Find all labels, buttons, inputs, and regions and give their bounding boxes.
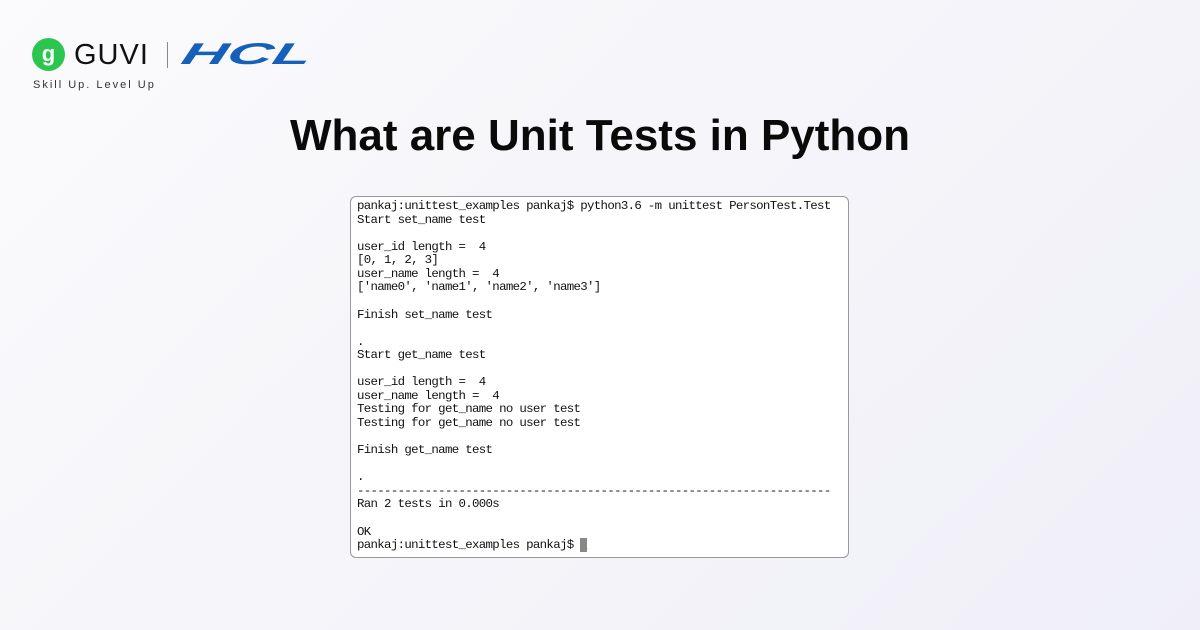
text: HCL: HCL	[178, 38, 316, 71]
tagline: Skill Up. Level Up	[33, 79, 156, 91]
icon: guvi green circle: g	[42, 41, 55, 66]
terminal panel	[350, 196, 849, 558]
title: What are Unit Tests in Python	[290, 111, 910, 160]
icon: guvi green circle	[32, 38, 65, 71]
terminal output text: pankaj:unittest_examples pankaj$ python3.6 -m unittest PersonTest.Test Start set_name test user_id length = 4 [0, 1, 2, 3] user_name length = 4 ['name0', 'name1', 'name2', 'name3'] Finish set_name test . Start get_name test user_id length = 4 user_name length = 4 Testing for get_name no user test Testing for get_name no user test Finish get_name test . ---------------------------------------------------------------------- Ran 2 tests in 0.000s OK pankaj:unittest_examples pankaj$ _	[357, 199, 831, 552]
logo: GUVI HCL	[32, 38, 316, 91]
text: GUVI: GUVI	[74, 39, 149, 71]
